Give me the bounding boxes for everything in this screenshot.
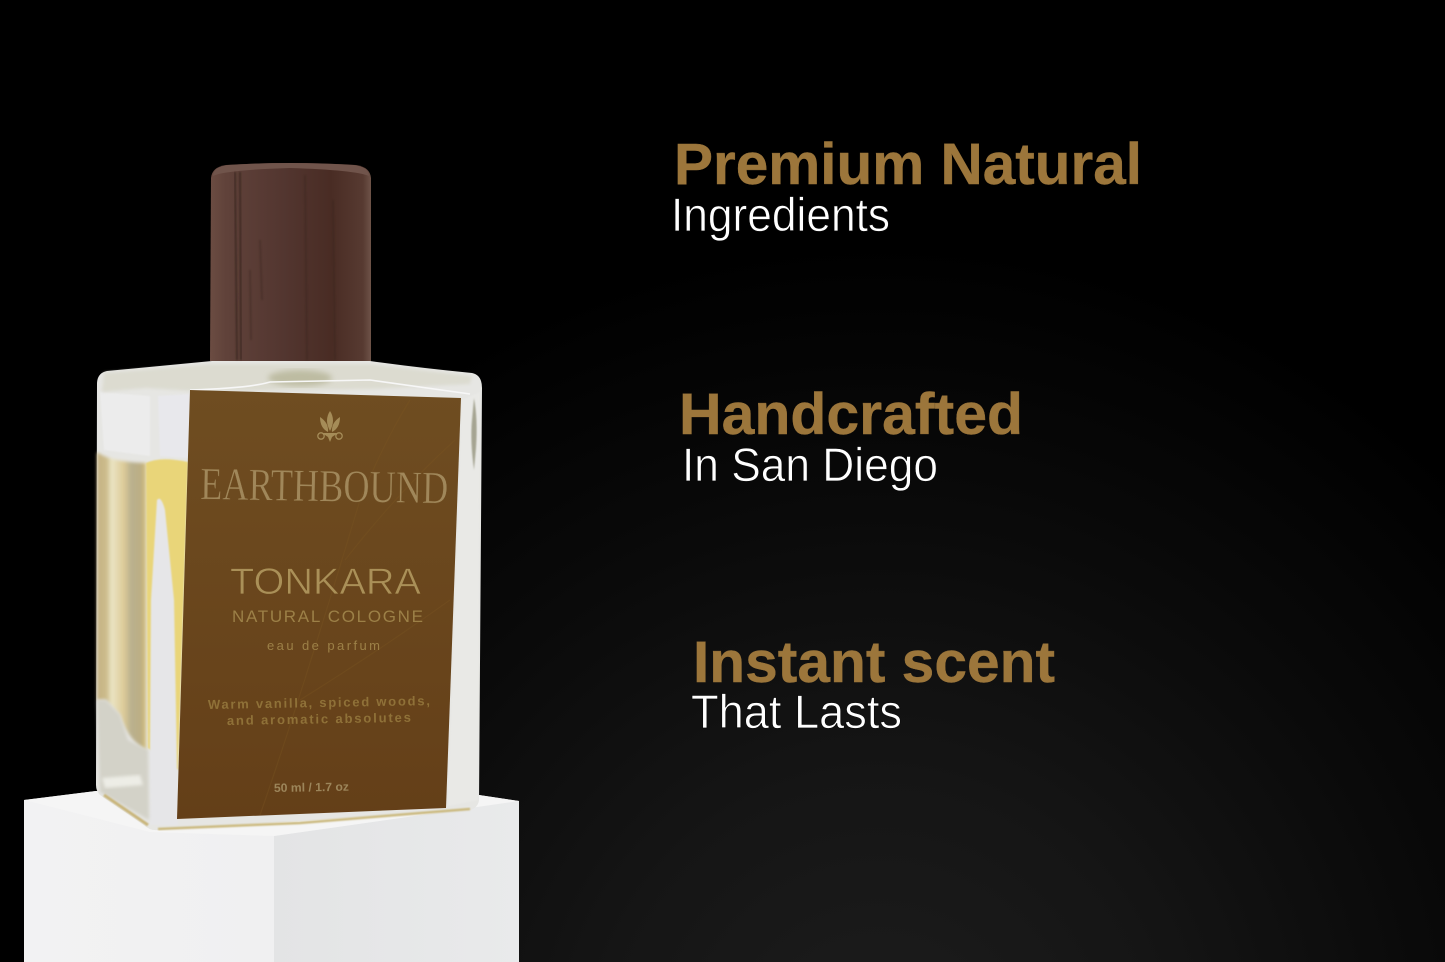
upper glass windows [100, 392, 150, 456]
feature: premium natural ingredients [671, 132, 1142, 241]
volume: 50 ml / 1.7 oz [274, 780, 349, 795]
front bevel reflection [150, 499, 178, 825]
shoulder rim [102, 364, 472, 392]
feature: instant scent that lasts [691, 630, 1055, 738]
description: and aromatic absolutes [227, 710, 411, 728]
bottle base line [158, 809, 470, 829]
liquid left chamber [97, 452, 146, 750]
bottle [96, 361, 482, 830]
liquid front chamber [146, 459, 188, 770]
glass body [96, 361, 482, 830]
heading: Handcrafted [679, 382, 1023, 447]
product name: TONKARA [230, 561, 421, 602]
cap [210, 163, 371, 361]
format: eau de parfum [267, 638, 380, 653]
feature: handcrafted in San Diego [679, 382, 1023, 491]
lower left glass corner [97, 700, 149, 820]
subheading: In San Diego [682, 438, 938, 491]
right reflection [471, 398, 477, 470]
heading: Instant scent [693, 630, 1055, 695]
heading: Premium Natural [674, 132, 1142, 197]
right glass side [448, 392, 480, 806]
description [208, 693, 430, 728]
description: Warm vanilla, spiced woods, [208, 693, 430, 712]
icon: fleur-de-lis [318, 411, 342, 442]
brand name: EARTHBOUND [200, 458, 449, 513]
pedestal [24, 791, 519, 962]
subheading: That Lasts [691, 685, 902, 738]
product type: NATURAL COLOGNE [232, 607, 423, 626]
leaf vein texture [260, 400, 455, 815]
label [177, 390, 461, 819]
subheading: Ingredients [671, 188, 890, 241]
